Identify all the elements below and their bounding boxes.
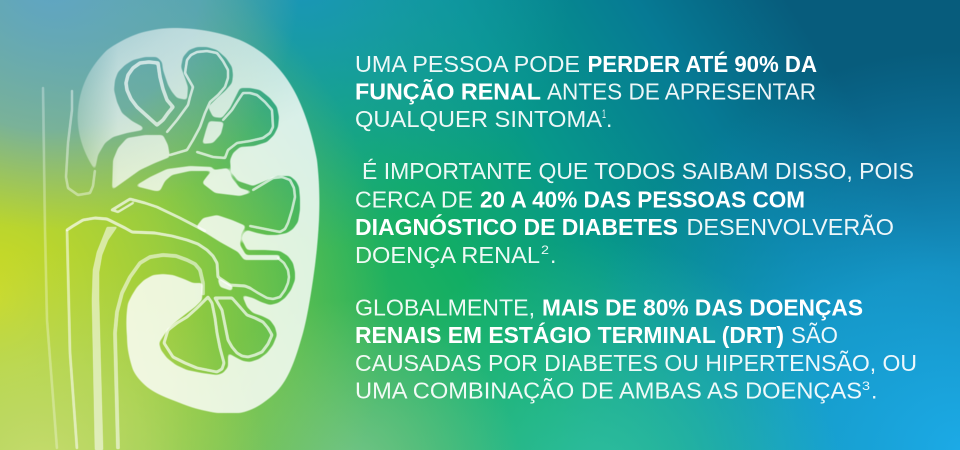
left looped vessel line <box>66 90 95 195</box>
text block: paragraph 3: SÃO <box>791 322 838 348</box>
text block: paragraph 1: . <box>606 106 612 132</box>
text block: paragraph 1: PERDER ATÉ 90% DA <box>588 50 817 77</box>
text block: paragraph 3: CAUSADAS POR DIABETES OU HIPERTENSÃO, OU <box>355 350 917 376</box>
text block: paragraph 2: CERCA DE <box>355 186 473 212</box>
text block: paragraph 2: DOENÇA RENAL <box>355 242 540 268</box>
text block: paragraph 3: MAIS DE 80% DAS DOENÇAS <box>542 294 863 320</box>
text block: paragraph 2: . <box>550 242 556 268</box>
text block: paragraph 2: 2 <box>541 243 549 257</box>
text block: paragraph 1: 1 <box>602 107 606 121</box>
text block: paragraph 3: GLOBALMENTE, <box>355 294 535 320</box>
text block: paragraph 1: FUNÇÃO RENAL <box>355 78 541 104</box>
text block: paragraph 2 <box>355 158 914 268</box>
text block: paragraph 3: 3 <box>862 379 870 393</box>
kidney body <box>78 28 320 414</box>
text block: paragraph 1: QUALQUER SINTOMA <box>355 106 603 132</box>
text block: paragraph 2: É IMPORTANTE QUE TODOS SAIBAM DISSO, POIS <box>362 158 914 184</box>
text block: paragraph 2: DESENVOLVERÃO <box>686 214 894 240</box>
text block: paragraph 3: . <box>871 378 877 404</box>
text block: paragraph 1 <box>355 50 817 132</box>
icon: kidney illustration <box>43 20 330 450</box>
text block: paragraph 2: DIAGNÓSTICO DE DIABETES <box>355 213 678 240</box>
left outer vessel line <box>43 87 57 449</box>
text block: paragraph 1: UMA PESSOA PODE <box>355 51 580 77</box>
text block: paragraph 3 <box>355 294 917 404</box>
kidney lobes and vessel lines <box>67 51 295 372</box>
text block: paragraph 2: 20 A 40% DAS PESSOAS COM <box>480 186 805 212</box>
text block: paragraph 1: ANTES DE APRESENTAR <box>547 78 816 104</box>
text block: paragraph 3: RENAIS EM ESTÁGIO TERMINAL (DRT) <box>355 321 784 348</box>
text block: paragraph 3: UMA COMBINAÇÃO DE AMBAS AS DOENÇAS <box>355 378 862 404</box>
ureter and vessel lines <box>67 227 203 450</box>
